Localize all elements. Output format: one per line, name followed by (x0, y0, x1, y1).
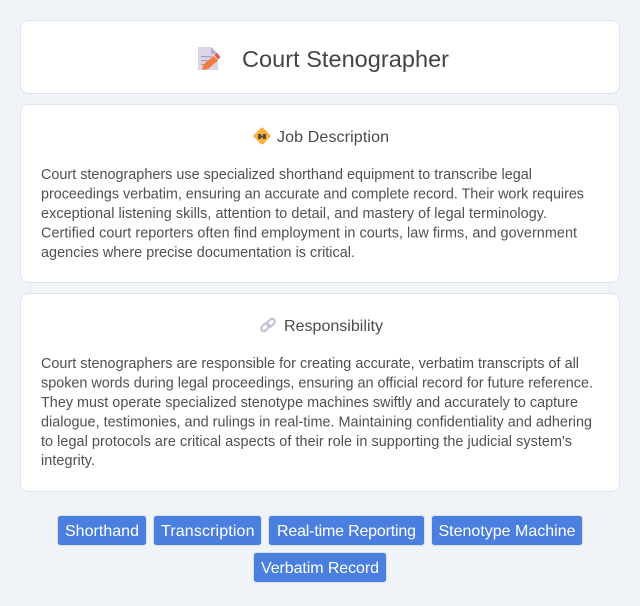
text block: responsibility: dialogue, testimonies, and rulings in real-time. Maintaining confidentiality and adhering (41, 414, 592, 430)
text block: job description: proceedings verbatim, ensuring an accurate and complete record. Their work requires (41, 186, 584, 202)
text block: responsibility: to legal protocols are critical aspects of their role in supporting the judicial system's (41, 434, 572, 450)
panel: responsibility (20, 294, 620, 492)
text block: job description: Certified court reporters often find employment in courts, law firms, and government (41, 226, 577, 242)
tag: verbatim record: Verbatim Record (261, 560, 379, 577)
text block: responsibility (41, 356, 593, 469)
icon: document with pencil (198, 47, 220, 70)
tag: transcription: Transcription (161, 523, 254, 540)
tag: stenotype machine: Stenotype Machine (438, 523, 576, 540)
text block: job description: exceptional listening skills, attention to detail, and mastery of legal terminology. (41, 206, 547, 222)
tag: real-time reporting (268, 516, 424, 546)
title: Court Stenographer (242, 46, 449, 72)
tag: verbatim record (254, 552, 386, 582)
tag: transcription (154, 516, 262, 546)
text block: job description: agencies where precise documentation is critical. (41, 245, 355, 261)
text block: responsibility: spoken words during legal proceedings, ensuring an official record for future reference. (41, 376, 593, 392)
panel: title card (20, 20, 620, 94)
tag list (58, 516, 582, 582)
panel: job description (20, 104, 620, 282)
icon: chain link (260, 318, 276, 332)
tag: stenotype machine (432, 516, 582, 546)
text block: responsibility: integrity. (41, 453, 95, 469)
tag: shorthand (58, 516, 146, 546)
heading: job description: Job Description (277, 129, 389, 146)
text block: job description (41, 167, 584, 261)
text block: responsibility: They must operate specialized stenotype machines swiftly and accurately to capture (41, 395, 578, 411)
icon: orange diamond (253, 127, 271, 145)
text block: job description: Court stenographers use specialized shorthand equipment to transcribe legal (41, 167, 532, 183)
text block: responsibility: Court stenographers are responsible for creating accurate, verbatim transcripts of all (41, 356, 579, 372)
tag: shorthand: Shorthand (65, 523, 139, 540)
heading: responsibility: Responsibility (284, 318, 383, 335)
tag: real-time reporting: Real-time Reporting (277, 523, 416, 540)
